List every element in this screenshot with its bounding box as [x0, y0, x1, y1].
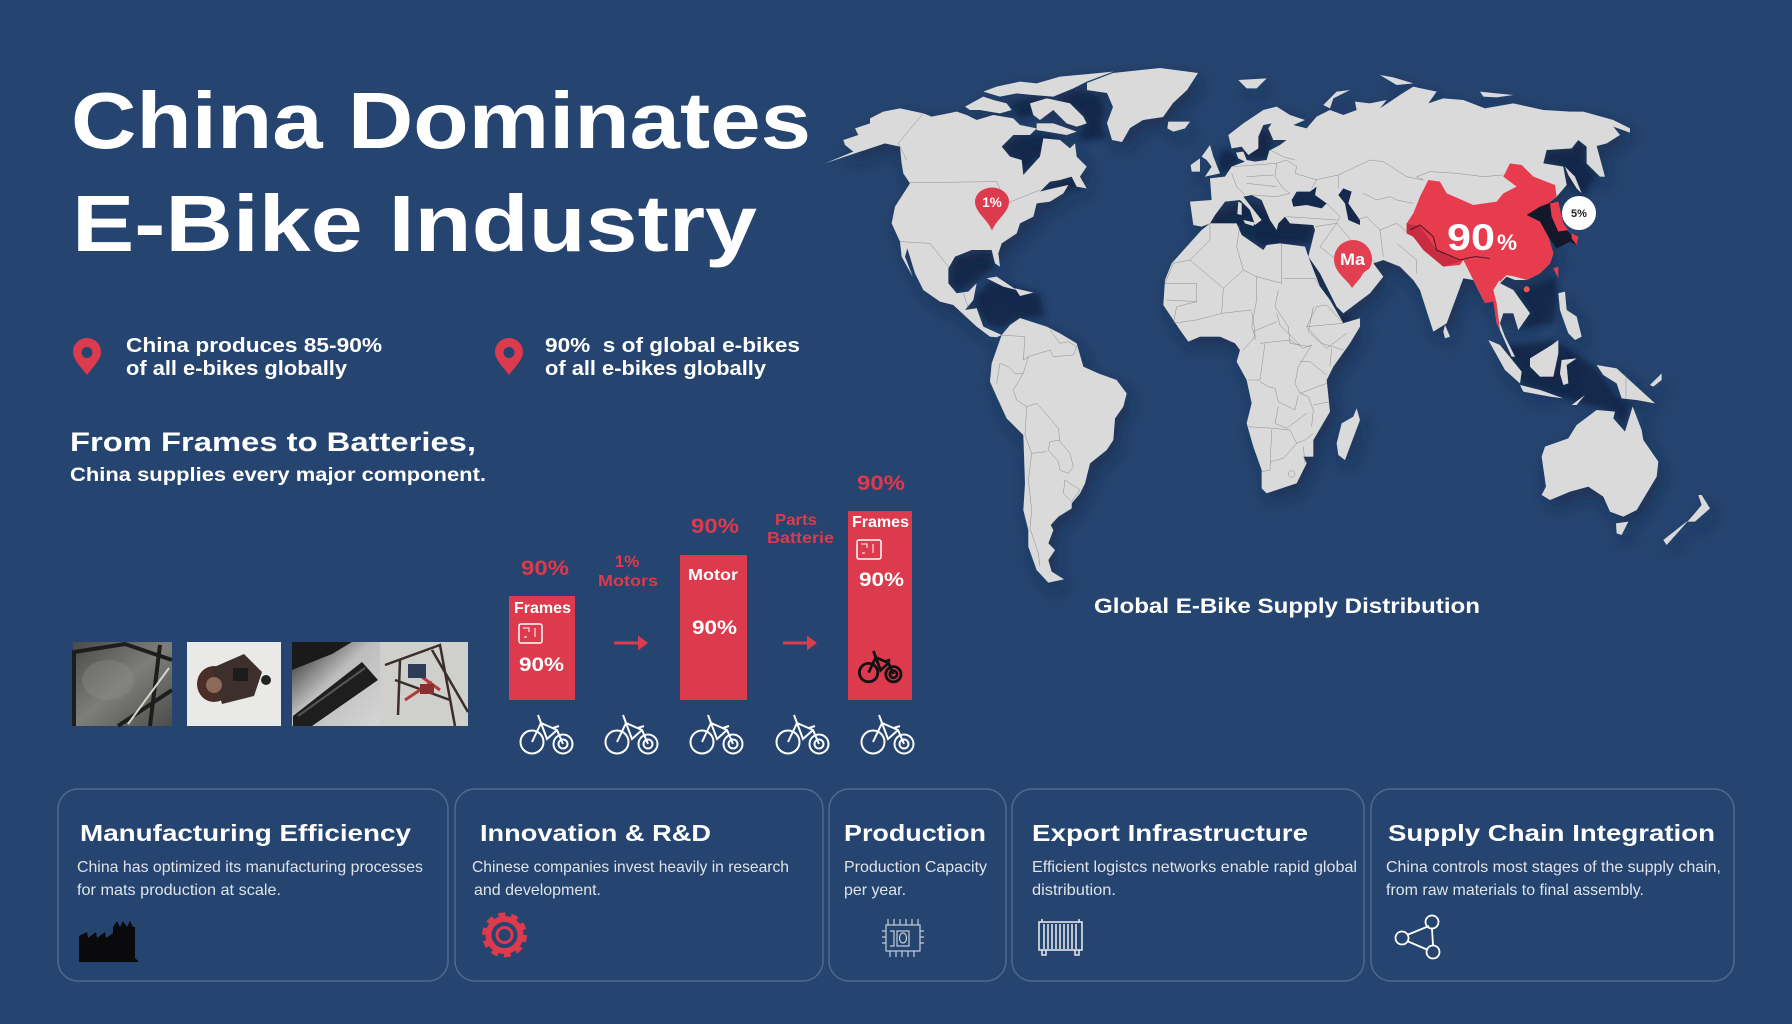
panel: manufacturing efficiency: [58, 789, 448, 981]
panel: innovation and r&d: [455, 789, 823, 981]
pin: middle east: [1334, 240, 1372, 288]
bike icon row: [520, 715, 914, 754]
icon: chip: [882, 919, 924, 957]
africa: [1163, 223, 1360, 493]
south america: [990, 318, 1127, 583]
panel: production: Production: [844, 820, 986, 846]
panel: supply chain integration: Supply Chain Integration: [1388, 820, 1715, 846]
icon: factory: [79, 921, 139, 962]
arctic islands: [965, 72, 1113, 135]
title: [71, 76, 811, 268]
panel: export infrastructure: [1012, 789, 1364, 981]
greenland: [1087, 68, 1198, 142]
country borders: [898, 113, 1626, 567]
photo: frame: [73, 642, 172, 726]
stat: China produces 85-90%: [73, 335, 382, 380]
title: China Dominates: [71, 76, 811, 165]
stat: China produces 85-90%: of all e-bikes globally: [126, 358, 348, 380]
world map: [825, 68, 1710, 583]
bar: frames: Frames: [514, 600, 571, 617]
inland seas: [1292, 187, 1360, 225]
pacific north islands: [1480, 92, 1582, 193]
bar: frames: [509, 557, 575, 700]
bar: frames: 90%: [521, 557, 569, 580]
philippines and sri lanka: [1443, 292, 1582, 340]
photo: battery: [292, 642, 380, 726]
map labels: %: [1497, 230, 1517, 255]
label: parts batteries: [767, 512, 834, 547]
bar: frames: 90%: [519, 655, 564, 676]
bar: motor: 90%: [691, 515, 739, 538]
component photos: [73, 642, 468, 726]
panel: supply chain integration: [1371, 789, 1734, 981]
bar: motor: Motor: [688, 567, 738, 584]
panel: supply chain integration: China controls most stages of the supply chain,: [1386, 859, 1721, 876]
label: motors 1%: Motors: [598, 573, 658, 590]
caribbean islands: [987, 277, 1033, 296]
label: parts batteries: Batterie: [767, 530, 834, 547]
arrow: [783, 636, 817, 650]
map labels: 1%: [982, 195, 1002, 210]
panel: innovation and r&d: and development.: [474, 882, 601, 899]
bar: frames tall: 90%: [859, 570, 904, 591]
panel: export infrastructure: distribution.: [1032, 882, 1116, 899]
bar: frames tall: [848, 472, 912, 700]
panel: innovation and r&d: Innovation & R&D: [480, 820, 711, 846]
highlight: china: [1407, 163, 1578, 330]
subheading: From Frames to Batteries,: [70, 427, 476, 457]
label: motors 1%: [598, 552, 658, 590]
icon: network: [1396, 916, 1440, 958]
europe and atlantic islands: [1167, 75, 1413, 226]
panel: production: per year.: [844, 882, 906, 899]
subheading: China supplies every major component.: [70, 464, 486, 486]
land masses: [825, 68, 1710, 583]
bar: motor: 90%: [692, 618, 737, 639]
panel: export infrastructure: Efficient logistcs networks enable rapid global: [1032, 859, 1357, 876]
panel: production: Production Capacity: [844, 859, 987, 876]
new zealand: [1663, 495, 1710, 545]
australia: [1542, 407, 1658, 535]
madagascar: [1337, 408, 1360, 460]
stat: 90% of global e-bikes: [495, 335, 800, 380]
icon: gear: [484, 914, 525, 956]
icon: location pin: [73, 338, 101, 375]
icon: black bike: [859, 651, 901, 682]
pin: usa: [975, 188, 1009, 230]
panel: manufacturing efficiency: Manufacturing Efficiency: [80, 820, 411, 846]
bar: frames tall: 90%: [857, 472, 905, 495]
stat: 90% of global e-bikes: 90% s of global e-bikes: [545, 335, 800, 357]
panel: production: [829, 789, 1006, 981]
panel: supply chain integration: from raw materials to final assembly.: [1386, 882, 1644, 899]
panel: export infrastructure: Export Infrastructure: [1032, 820, 1308, 846]
eurasia: [1190, 87, 1630, 357]
stat: 90% of global e-bikes: of all e-bikes globally: [545, 358, 767, 380]
maritime southeast asia: [1488, 340, 1662, 405]
stat: China produces 85-90%: China produces 85-90%: [126, 335, 382, 357]
bar: motor: [680, 515, 747, 700]
map labels: 90: [1447, 217, 1495, 258]
panel: manufacturing efficiency: China has optimized its manufacturing processes: [77, 859, 423, 876]
icon: location pin: [495, 338, 523, 375]
map labels: Ma: [1340, 250, 1366, 269]
marker: japan: [1562, 196, 1596, 230]
arrow: [614, 636, 648, 650]
dark seas: [950, 90, 1630, 427]
title: E-Bike Industry: [72, 179, 758, 268]
map labels: [982, 195, 1587, 269]
map labels: 5%: [1571, 208, 1587, 220]
bar: frames tall: Frames: [852, 514, 909, 531]
north america: [825, 108, 1087, 337]
subheading: [70, 427, 486, 486]
panel: manufacturing efficiency: for mats production at scale.: [77, 882, 281, 899]
label: motors 1%: 1%: [615, 552, 639, 571]
bar chart: component share: [509, 472, 912, 700]
map caption: Global E-Bike Supply Distribution: [1094, 595, 1480, 618]
panel: innovation and r&d: Chinese companies invest heavily in research: [472, 859, 789, 876]
photo: motor: [187, 642, 281, 726]
icon: container: [1039, 919, 1082, 955]
photo: wiring: [380, 642, 468, 726]
label: parts batteries: Parts: [775, 512, 817, 529]
